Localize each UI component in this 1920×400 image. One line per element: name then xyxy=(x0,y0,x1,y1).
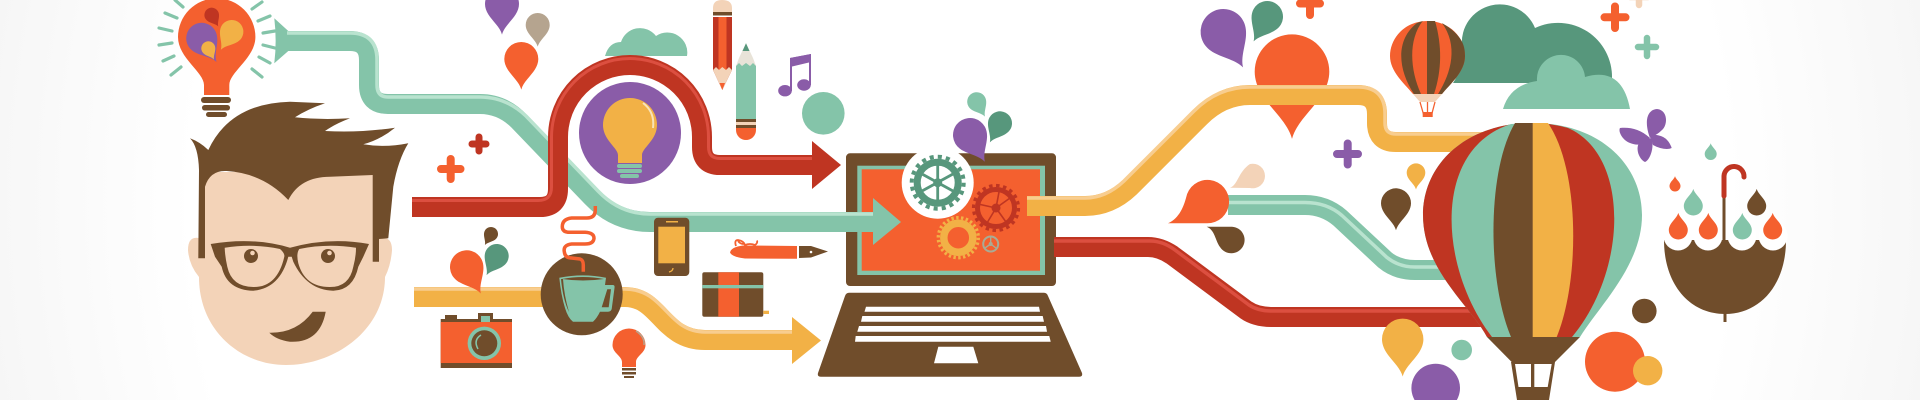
stripe: teal highlight over screen xyxy=(840,212,873,216)
icon: butterfly xyxy=(1619,109,1672,162)
icon: big orange pin behind pipe xyxy=(1255,34,1329,139)
icon: small striped balloon xyxy=(1390,21,1465,117)
icon: teal circle xyxy=(802,92,845,135)
smile xyxy=(269,312,326,342)
icon: small orange bulb xyxy=(612,329,646,378)
icon: orange drop at teal pipe xyxy=(1168,180,1229,223)
icon: plus signs xyxy=(441,137,486,179)
icon: notebook xyxy=(702,272,769,317)
yellow gear xyxy=(938,218,978,258)
arrow: yellow pipe from laptop xyxy=(1027,87,1500,206)
icon: camera xyxy=(441,313,512,368)
rain drops xyxy=(1669,143,1782,240)
icon: upper right drops xyxy=(1192,0,1289,78)
basket xyxy=(1511,362,1555,400)
brown panel xyxy=(1493,123,1533,337)
umbrella canopy xyxy=(1664,240,1786,314)
small gear xyxy=(983,236,998,252)
yellow panel xyxy=(1533,123,1573,337)
balloon neck xyxy=(1487,337,1580,362)
glasses xyxy=(211,241,369,291)
balloon envelope xyxy=(1423,123,1642,337)
icon: gear cluster xyxy=(902,147,1018,258)
laptop-bound pipe drawn later xyxy=(287,41,873,222)
icon: dark cloud xyxy=(1453,4,1612,83)
face: head xyxy=(188,102,408,365)
red gear xyxy=(974,186,1018,230)
hair xyxy=(190,102,408,262)
icon: drops above red arc xyxy=(485,0,550,90)
icon: coffee cup xyxy=(541,206,623,335)
bulb rays xyxy=(159,0,275,77)
icon: brown circle xyxy=(1632,299,1657,323)
icon: laptop xyxy=(818,153,1082,377)
umbrella shaft xyxy=(1722,195,1726,247)
eyes xyxy=(244,249,335,263)
icon: light cloud xyxy=(1503,55,1630,109)
icon: music notes xyxy=(778,54,811,96)
icon: purple circle with light bulb xyxy=(579,82,681,184)
stripe: teal arrow shaft over screen xyxy=(840,212,873,232)
red panels xyxy=(1423,123,1614,337)
icon: orange and yellow circles xyxy=(1585,332,1662,392)
icon: big hot air balloon xyxy=(1423,123,1642,400)
white circle green gear xyxy=(902,147,974,219)
icon: fountain pen xyxy=(730,240,828,259)
icon: upside-down umbrella xyxy=(1664,143,1788,322)
umbrella tip xyxy=(1724,312,1726,322)
icon: small drops and circles near balloon xyxy=(1381,163,1472,400)
funnel end xyxy=(274,18,288,63)
arrow: yellow lower pipe xyxy=(414,289,821,364)
bulb glass xyxy=(178,0,255,95)
icon: drops above laptop xyxy=(947,89,1016,170)
icon: pencil red xyxy=(713,0,732,90)
icon: drops above yellow pipe xyxy=(444,224,513,301)
icon: small cloud top centre xyxy=(605,28,687,56)
teal pipe highlight xyxy=(287,33,873,214)
icon: pencil teal xyxy=(736,43,756,140)
laptop base xyxy=(818,293,1082,377)
laptop screen xyxy=(846,153,1056,286)
icon: plus signs right xyxy=(1300,0,1656,164)
arrow: teal arrow head into laptop xyxy=(873,198,901,245)
icon: drops beside teal pipe xyxy=(1207,164,1265,253)
canopy scallops xyxy=(1664,222,1788,250)
teal left panel xyxy=(1452,123,1533,337)
umbrella handle xyxy=(1724,167,1744,196)
arrow: red pipe xyxy=(412,59,841,207)
arrow: teal pipe into laptop xyxy=(274,18,873,222)
bulb base xyxy=(201,97,231,117)
head skin xyxy=(188,172,392,365)
arrow: teal pipe right xyxy=(1228,202,1450,270)
icon: phone xyxy=(654,218,689,276)
bulb drops xyxy=(180,5,248,70)
icon: top-left idea bulb xyxy=(159,0,275,117)
arrow: red pipe right xyxy=(1054,241,1500,317)
